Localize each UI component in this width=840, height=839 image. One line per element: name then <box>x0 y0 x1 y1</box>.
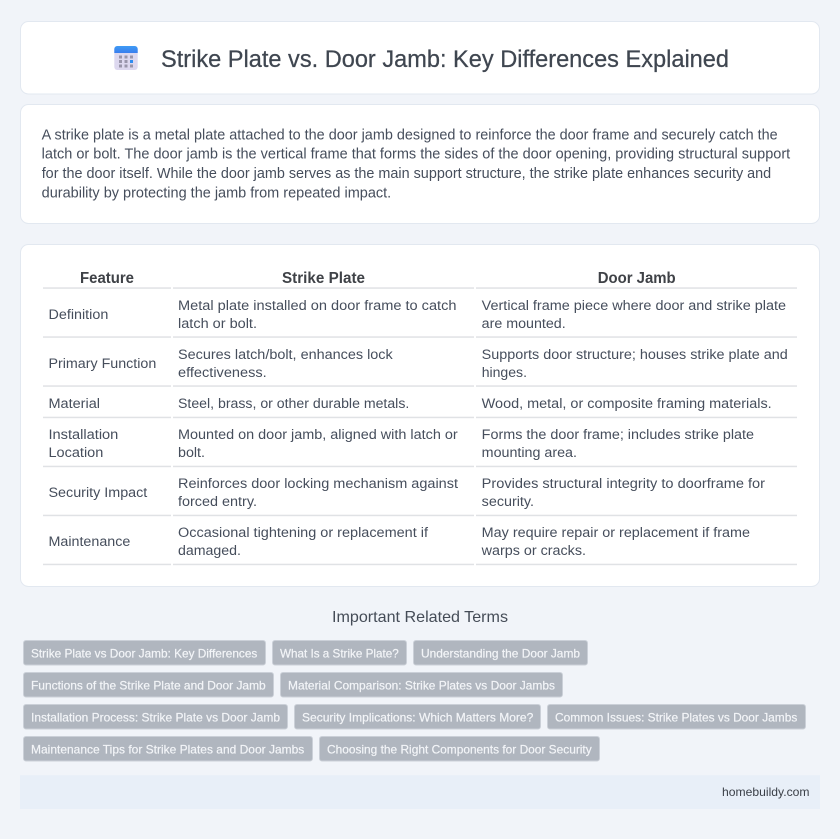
tag: material comparison: Material Comparison: Strike Plates vs Door Jambs <box>288 678 555 692</box>
table row: Definition: are mounted. <box>482 316 566 332</box>
table row: Installation Location: Mounted on door jamb, aligned with latch or <box>178 427 458 443</box>
table row: Installation Location: Forms the door frame; includes strike plate <box>482 427 754 443</box>
table header row: Strike Plate <box>282 270 365 287</box>
table header row: Door Jamb <box>598 270 676 287</box>
related term tags <box>24 640 806 761</box>
table row: Security Impact: Provides structural integrity to doorframe for <box>482 476 765 492</box>
table header row: Feature <box>80 270 134 287</box>
table row: Material: Wood, metal, or composite framing materials. <box>482 396 772 412</box>
table row: Definition: Definition <box>48 307 108 323</box>
footer bar <box>20 775 820 809</box>
tag: choosing components: Choosing the Right Components for Door Security <box>327 742 592 756</box>
icon: calendar <box>114 46 138 70</box>
text block: definition paragraph: latch or bolt. The door jamb is the vertical frame that forms the sides of the door opening, providing structural support <box>42 147 790 163</box>
table row: Installation Location <box>48 427 754 461</box>
tag: understanding the door jamb: Understanding the Door Jamb <box>421 646 580 660</box>
table row: Security Impact: Reinforces door locking mechanism against <box>178 476 458 492</box>
table row: Maintenance: Maintenance <box>48 534 130 550</box>
table row: Security Impact: security. <box>482 494 534 510</box>
table row: Maintenance: May require repair or replacement if frame <box>482 525 750 541</box>
table row: Definition: latch or bolt. <box>178 316 257 332</box>
tag: what is a strike plate: What Is a Strike Plate? <box>280 646 399 660</box>
table row: Material <box>48 396 772 412</box>
tag: key differences <box>24 640 266 665</box>
table row: Primary Function: hinges. <box>482 365 527 381</box>
table row: Primary Function: effectiveness. <box>178 365 267 381</box>
table row: Maintenance: warps or cracks. <box>481 543 586 559</box>
table row: Definition: Metal plate installed on door frame to catch <box>178 298 457 314</box>
panel: comparison table <box>20 244 820 586</box>
tag: common issues <box>548 704 806 729</box>
table row: Primary Function <box>48 347 788 381</box>
tag: understanding the door jamb <box>414 640 588 665</box>
table row: Material: Steel, brass, or other durable metals. <box>178 396 409 412</box>
table header row <box>80 270 676 287</box>
table row: Installation Location: Installation <box>48 427 118 443</box>
table row: Definition: Vertical frame piece where door and strike plate <box>482 298 786 314</box>
text block: definition paragraph: durability by protecting the jamb from repeated impact. <box>42 185 391 201</box>
title: Strike Plate vs. Door Jamb: Key Differences Explained <box>161 46 729 73</box>
tag: choosing components <box>320 736 600 761</box>
text block: definition paragraph: A strike plate is a metal plate attached to the door jamb designed to reinforce the door frame and securely catch the <box>42 127 778 143</box>
tag: material comparison <box>280 672 562 697</box>
heading: important related terms: Important Related Terms <box>332 609 508 626</box>
table row: Installation Location: Location <box>48 445 103 461</box>
table row: Security Impact: forced entry. <box>178 494 257 510</box>
tag: installation process <box>24 704 288 729</box>
tag: functions: Functions of the Strike Plate and Door Jamb <box>31 678 266 692</box>
table row: Security Impact: Security Impact <box>48 485 147 501</box>
table row: Installation Location: bolt. <box>178 445 205 461</box>
table row: Definition <box>48 298 786 332</box>
tag: common issues: Common Issues: Strike Plates vs Door Jambs <box>555 710 797 724</box>
text block: definition paragraph <box>42 127 790 201</box>
table row: Primary Function: Supports door structure; houses strike plate and <box>482 347 788 363</box>
table row: Maintenance: damaged. <box>178 543 241 559</box>
tag: functions <box>24 672 274 697</box>
tag: installation process: Installation Process: Strike Plate vs Door Jamb <box>31 710 280 724</box>
tag: maintenance tips <box>24 736 312 761</box>
panel: title header <box>20 22 820 94</box>
table row: Primary Function: Secures latch/bolt, enhances lock <box>178 347 394 363</box>
table row: Primary Function: Primary Function <box>48 356 156 372</box>
tag: security implications <box>294 704 540 729</box>
table row: Maintenance: Occasional tightening or replacement if <box>178 525 428 541</box>
table row: Maintenance <box>48 525 750 559</box>
table row: Security Impact <box>48 476 765 510</box>
text block: definition paragraph: for the door itself. While the door jamb serves as the main support structure, the strike plate enhances security and <box>42 166 771 182</box>
table row: Installation Location: mounting area. <box>482 445 577 461</box>
tag: maintenance tips: Maintenance Tips for Strike Plates and Door Jambs <box>31 742 304 756</box>
tag: what is a strike plate <box>272 640 406 665</box>
panel: intro paragraph <box>20 104 820 224</box>
table row: Material: Material <box>48 396 100 412</box>
footer source text: homebuildy.com <box>722 785 810 799</box>
tag: security implications: Security Implications: Which Matters More? <box>302 710 534 724</box>
tag: key differences: Strike Plate vs Door Jamb: Key Differences <box>31 646 257 660</box>
